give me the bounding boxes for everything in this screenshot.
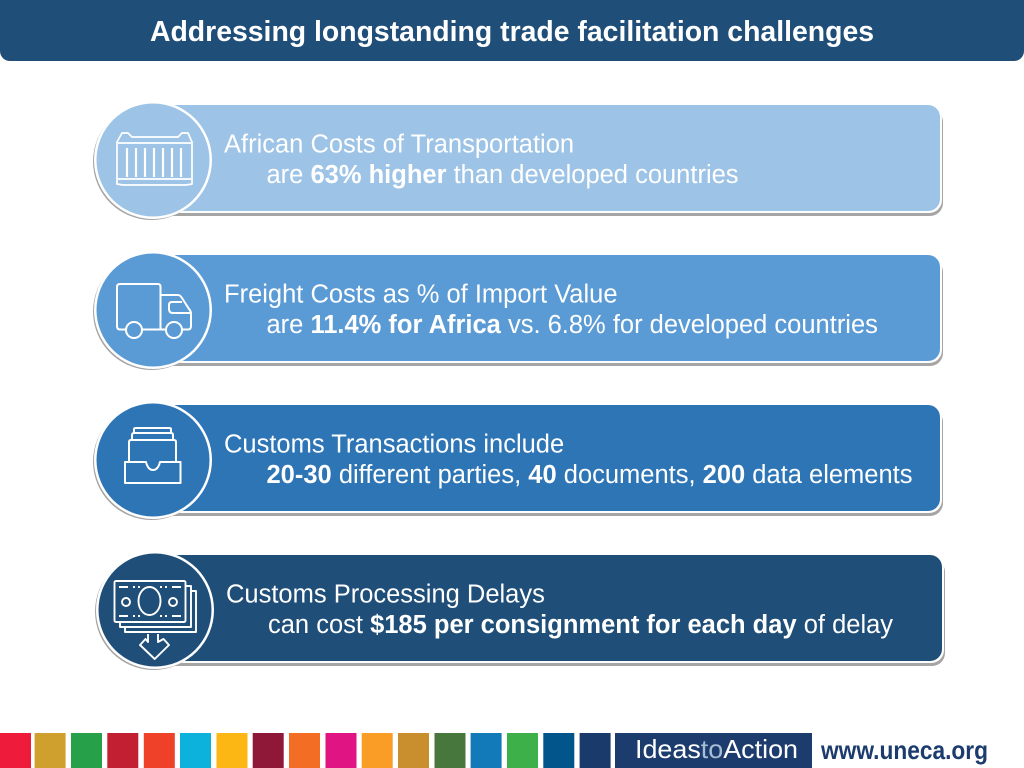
text: processing delays: Customs Processing Delays — [226, 580, 545, 608]
icon: banknotes with down arrow — [114, 581, 196, 659]
text: customs transactions: 20-30 different parties, 40 documents, 200 data elements — [266, 461, 912, 489]
footer: Ideas to Action badge: IdeastoAction — [635, 734, 798, 764]
icon: document tray — [125, 428, 180, 483]
footer colour squares — [0, 733, 611, 768]
footer: Ideas to Action badge — [615, 733, 812, 768]
panel: customs transactions — [93, 401, 943, 520]
icon: shipping container — [117, 133, 192, 185]
panel: freight costs — [93, 251, 943, 370]
text: freight costs: are 11.4% for Africa vs. 6.8% for developed countries — [266, 311, 878, 339]
text: processing delays: can cost $185 per consignment for each day of delay — [268, 611, 893, 639]
footer: website: www.uneca.org — [820, 735, 988, 765]
panel: transportation costs — [93, 101, 943, 220]
text: customs transactions: Customs Transactions include — [224, 430, 564, 458]
icon: truck — [117, 284, 191, 338]
text: transportation costs: are 63% higher than developed countries — [266, 161, 739, 189]
panel: processing delays — [95, 551, 945, 670]
title banner — [0, 0, 1024, 61]
text: transportation costs: African Costs of Transportation — [224, 130, 574, 158]
text: freight costs: Freight Costs as % of Import Value — [224, 280, 618, 308]
title: Addressing longstanding trade facilitation challenges — [150, 16, 874, 48]
